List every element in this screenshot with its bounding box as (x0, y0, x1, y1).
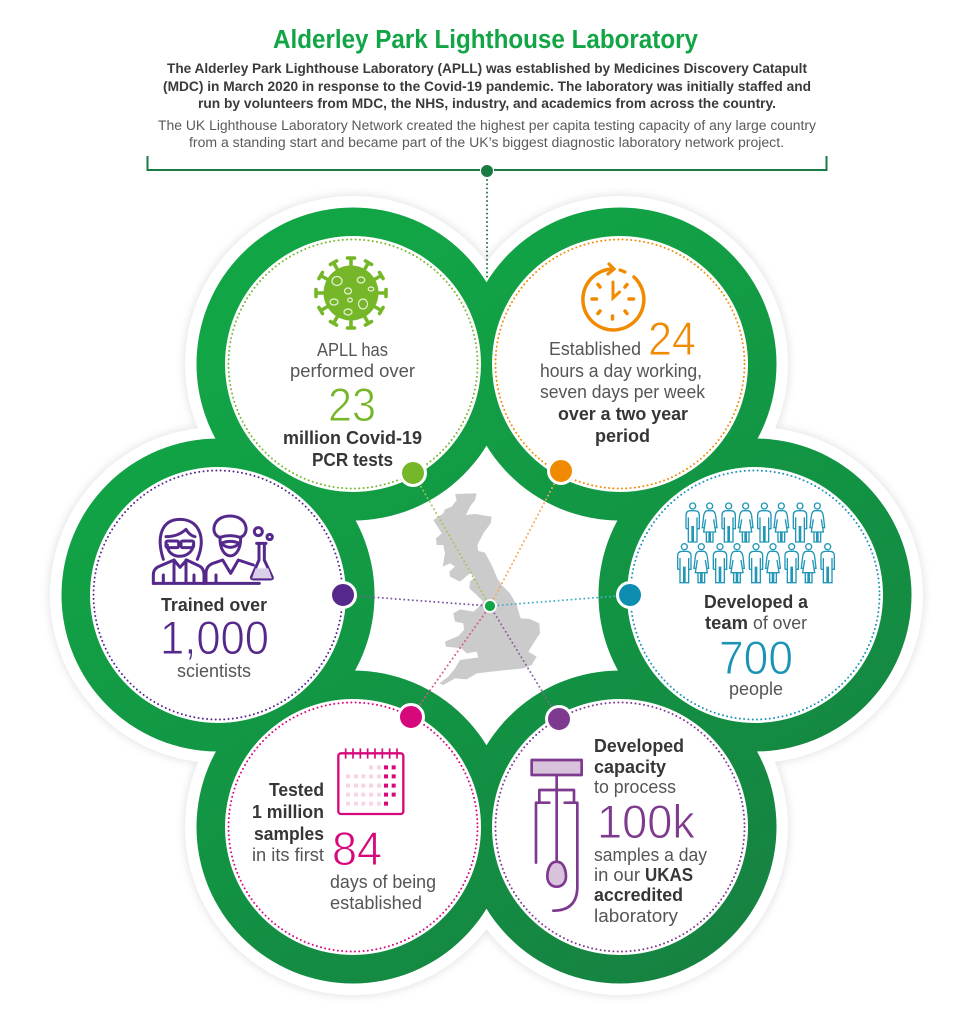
text: established: hours a day working, (540, 360, 702, 381)
text: team: 700 (719, 631, 793, 684)
map of the UK (433, 493, 540, 685)
text: trained: Trained over (161, 594, 267, 615)
panel: scientists (153, 516, 356, 681)
dotted inner rings (94, 240, 880, 952)
text: team (704, 591, 809, 699)
text: trained: 1,000 (160, 611, 269, 664)
map centre marker (484, 600, 496, 612)
intro text: regular paragraph (158, 118, 816, 150)
text: samples tested: 1 million (252, 801, 324, 822)
marker: pink (398, 704, 424, 730)
icon: scientists with flask (153, 516, 272, 583)
text: capacity: capacity (594, 756, 667, 777)
intro text: bold paragraph (163, 61, 811, 111)
intro text: bold paragraph: run by volunteers from MDC, the NHS, industry, and academics from across the country. (198, 96, 776, 111)
text: APLL tests: 23 (328, 378, 376, 431)
text: samples tested: samples (254, 823, 324, 844)
icon: calendar (338, 748, 403, 814)
text: APLL tests: performed over (290, 360, 415, 381)
white circle interiors (90, 236, 883, 955)
text: capacity: in our (594, 864, 640, 885)
text: team: people (729, 678, 783, 699)
connector lines from map centre (343, 471, 630, 719)
marker: orange (548, 458, 574, 484)
text: APLL tests (283, 339, 422, 470)
text: capacity: UKAS (645, 864, 693, 885)
text: capacity (594, 735, 708, 926)
marker: teal (618, 582, 642, 608)
marker: purple (330, 582, 356, 608)
icon: virus (316, 258, 386, 328)
text: samples tested: 84 (332, 822, 382, 875)
panel: 24 hours (540, 264, 706, 484)
icon: people rows (678, 503, 834, 583)
text: team: of over (753, 612, 807, 633)
text: capacity: Developed (594, 735, 684, 756)
intro text: regular paragraph: The UK Lighthouse Laboratory Network created the highest per capita testing capacity of any large country (158, 118, 816, 133)
text: samples tested: established (330, 892, 422, 913)
icon: clock (583, 264, 644, 330)
text: capacity: to process (594, 776, 676, 797)
header bracket with connector (148, 156, 826, 279)
marker: green (400, 460, 426, 486)
text: established (540, 312, 706, 446)
title: Alderley Park Lighthouse Laboratory (273, 26, 699, 54)
marker: plum (546, 706, 572, 732)
panel: COVID tests (283, 258, 426, 486)
intro text: bold paragraph: (MDC) in March 2020 in response to the Covid-19 pandemic. The laboratory was initially staffed and (163, 79, 811, 94)
intro text: bold paragraph: The Alderley Park Lighthouse Laboratory (APLL) was established by Medicines Discovery Catapult (167, 61, 807, 76)
text: capacity: laboratory (594, 905, 679, 926)
text: trained: scientists (177, 660, 251, 681)
icon: pipette (532, 760, 582, 911)
text: samples tested: days of being (330, 871, 436, 892)
text: APLL tests: million Covid-19 (283, 427, 422, 448)
text: established: over a two year (558, 403, 688, 424)
text: trained (160, 594, 269, 681)
panel: capacity (532, 706, 708, 926)
intro text: regular paragraph: from a standing start and became part of the UK’s biggest diagnostic laboratory network project. (189, 135, 784, 150)
flower background halo (48, 194, 925, 997)
text: established: 24 (648, 312, 696, 365)
text: capacity: samples a day (594, 844, 708, 865)
text: capacity: accredited (594, 884, 683, 905)
panel: samples tested (252, 704, 436, 913)
text: established: Established (549, 338, 641, 359)
panel: team (618, 503, 834, 699)
green rings (62, 208, 912, 984)
text: established: period (595, 425, 650, 446)
text: samples tested (252, 779, 436, 913)
text: APLL tests: APLL has (317, 339, 388, 360)
text: team: team (705, 612, 748, 633)
text: samples tested: Tested (269, 779, 324, 800)
text: capacity: 100k (597, 795, 695, 848)
text: team: Developed a (704, 591, 809, 612)
text: samples tested: in its first (252, 844, 324, 865)
text: APLL tests: PCR tests (312, 449, 393, 470)
text: established: seven days per week (540, 381, 706, 402)
